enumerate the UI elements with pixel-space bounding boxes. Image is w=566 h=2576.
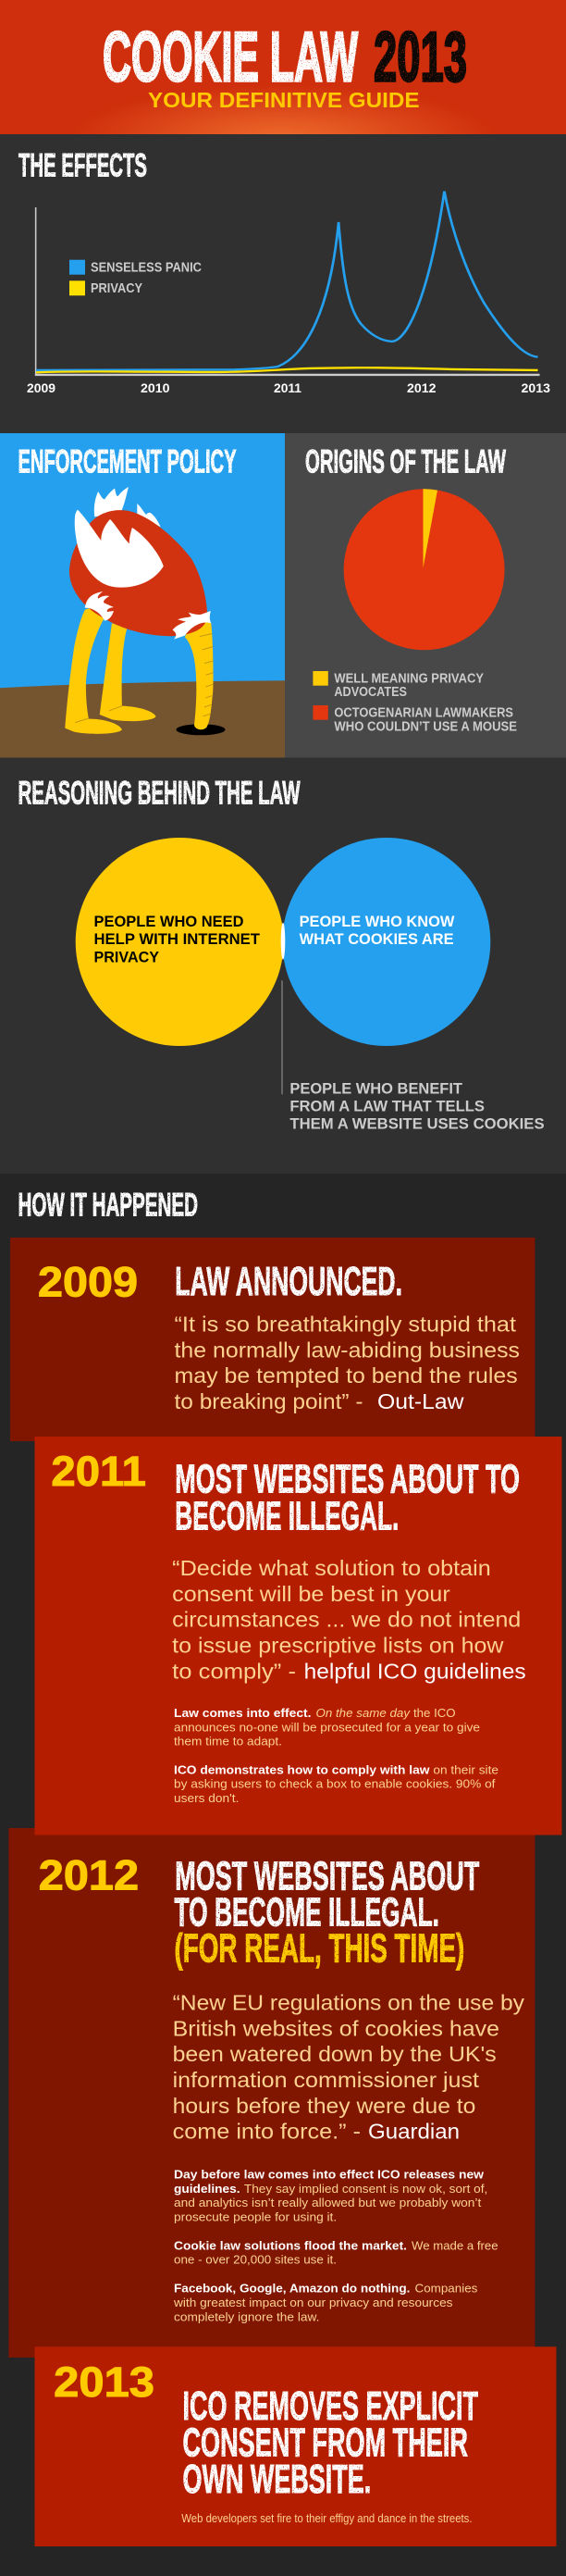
heading: reasoning: REASONING BEHIND THE LAW xyxy=(18,775,300,811)
quote: guardian: information commissioner just xyxy=(173,2068,480,2092)
body text: 2012 events: prosecute people for using it. xyxy=(174,2210,337,2223)
heading: how it happened: HOW IT HAPPENED xyxy=(18,1187,198,1223)
chart legend xyxy=(69,260,202,296)
quote: ico guidelines: helpful ICO guidelines xyxy=(304,1659,526,1683)
body text: 2012 events: Facebook, Google, Amazon do nothing. xyxy=(174,2283,410,2296)
quote: out-law: to breaking point” - xyxy=(174,1389,363,1413)
pie chart xyxy=(344,489,505,650)
body text: 2011 events: Law comes into effect. xyxy=(174,1707,311,1720)
quote: guardian: been watered down by the UK's xyxy=(173,2042,497,2066)
body text: 2012 events: with greatest impact on our privacy and resources xyxy=(173,2296,453,2309)
pie legend xyxy=(313,671,517,734)
subtitle: YOUR DEFINITIVE GUIDE xyxy=(148,88,420,112)
header banner xyxy=(0,0,566,134)
year 2009: 2009 xyxy=(38,1258,138,1305)
body text: 2012 events xyxy=(173,2169,498,2323)
panel: 2012 xyxy=(8,1828,535,2358)
callout: people who benefit: THEM A WEBSITE USES COOKIES xyxy=(289,1115,545,1133)
icon: ostrich with head in the ground xyxy=(65,487,226,735)
body text: 2011 events: announces no-one will be prosecuted for a year to give xyxy=(174,1722,480,1735)
pie legend: WHO COULDN’T USE A MOUSE xyxy=(334,719,517,734)
heading: most websites about to become illegal xyxy=(175,1457,520,1539)
quote: ico guidelines xyxy=(172,1556,526,1683)
quote: out-law: may be tempted to bend the rules xyxy=(174,1363,518,1388)
quote: guardian xyxy=(173,1990,525,2144)
venn diagram: PEOPLE WHO NEED xyxy=(94,913,244,930)
quote: ico guidelines: circumstances ... we do not intend xyxy=(172,1608,521,1632)
panel: 2013 xyxy=(35,2346,557,2546)
quote: ico guidelines: to issue prescriptive lists on how xyxy=(172,1634,504,1658)
body text: 2011 events: on their site xyxy=(433,1764,498,1777)
title: 2013 xyxy=(374,18,467,96)
body text: 2012 events: and analytics isn’t really allowed but we probably won’t xyxy=(174,2196,482,2209)
body text: 2011 events: the ICO xyxy=(413,1707,456,1720)
venn diagram: PEOPLE WHO KNOW xyxy=(300,913,455,930)
line chart: 2010 xyxy=(141,380,170,395)
body text: 2011 events xyxy=(174,1707,498,1805)
quote: ico guidelines: consent will be best in your xyxy=(172,1582,450,1606)
body text: 2012 events: Cookie law solutions flood the market. xyxy=(174,2239,407,2252)
callout: people who benefit: FROM A LAW THAT TELLS xyxy=(289,1098,485,1115)
venn diagram xyxy=(76,838,490,1046)
heading: ico removes explicit consent: OWN WEBSITE. xyxy=(183,2458,371,2502)
year 2012: 2012 xyxy=(39,1851,139,1898)
quote: guardian: “New EU regulations on the use by xyxy=(173,1990,525,2014)
panel: enforcement policy xyxy=(0,433,285,757)
ground xyxy=(0,680,285,757)
chart legend: PRIVACY xyxy=(91,281,142,296)
line chart: 2013 xyxy=(522,380,550,395)
body text: 2011 events: users don't. xyxy=(174,1792,239,1805)
panel: reasoning behind the law xyxy=(0,757,566,1174)
quote: guardian: come into force.” - xyxy=(173,2120,361,2144)
closing line: Web developers set fire to their effigy and dance in the streets. xyxy=(181,2512,473,2525)
body text: 2012 events: They say implied consent is now ok, sort of, xyxy=(244,2183,487,2196)
title: COOKIE LAW xyxy=(103,18,358,96)
body text: 2012 events: Companies xyxy=(414,2283,477,2296)
quote: ico guidelines: “Decide what solution to obtain xyxy=(172,1556,491,1580)
heading: most websites for real xyxy=(174,1854,480,1972)
quote: out-law: Out-Law xyxy=(377,1389,464,1413)
body text: 2012 events: Day before law comes into effect ICO releases new xyxy=(174,2169,484,2182)
venn diagram: PRIVACY xyxy=(94,948,160,965)
year 2011: 2011 xyxy=(51,1448,146,1495)
line chart xyxy=(27,192,550,395)
body text: 2011 events: them time to adapt. xyxy=(174,1736,282,1748)
body text: 2011 events: ICO demonstrates how to comply with law xyxy=(174,1764,430,1777)
quote: guardian: hours before they were due to xyxy=(173,2094,475,2118)
body text: 2012 events: guidelines. xyxy=(174,2183,240,2196)
quote: out-law: “It is so breathtakingly stupid that xyxy=(174,1312,517,1336)
body text: 2012 events: completely ignore the law. xyxy=(174,2310,319,2323)
body text: 2012 events: We made a free xyxy=(412,2239,498,2252)
quote: out-law: the normally law-abiding business xyxy=(174,1338,520,1363)
body text: 2012 events: one - over 20,000 sites use it. xyxy=(174,2254,337,2267)
heading: ico removes explicit consent xyxy=(183,2384,478,2502)
venn diagram: WHAT COOKIES ARE xyxy=(300,930,454,948)
line chart: 2012 xyxy=(407,380,437,395)
callout: people who benefit: PEOPLE WHO BENEFIT xyxy=(289,1080,463,1098)
heading: law announced: LAW ANNOUNCED. xyxy=(175,1260,402,1304)
line chart: 2011 xyxy=(274,380,301,395)
heading: the effects: THE EFFECTS xyxy=(18,148,147,184)
pie legend: ADVOCATES xyxy=(334,685,407,700)
line chart: 2009 xyxy=(27,380,55,395)
panel: 2011 xyxy=(35,1437,562,1835)
chart legend: SENSELESS PANIC xyxy=(91,260,202,275)
panel: the effects xyxy=(0,134,566,433)
callout: people who benefit xyxy=(282,980,545,1133)
pie legend: OCTOGENARIAN LAWMAKERS xyxy=(334,705,513,720)
body text: 2011 events: by asking users to check a box to enable cookies. 90% of xyxy=(174,1778,496,1791)
panel: 2009 xyxy=(10,1238,535,1441)
quote: ico guidelines: to comply” - xyxy=(172,1659,296,1683)
body text: 2011 events: On the same day xyxy=(316,1707,411,1720)
year 2013: 2013 xyxy=(54,2358,154,2406)
quote: guardian: Guardian xyxy=(368,2120,460,2144)
quote: out-law xyxy=(174,1312,520,1413)
heading: enforcement policy: ENFORCEMENT POLICY xyxy=(18,444,237,480)
quote: guardian: British websites of cookies have xyxy=(173,2016,499,2040)
venn diagram: HELP WITH INTERNET xyxy=(94,930,261,948)
pie legend: WELL MEANING PRIVACY xyxy=(334,671,484,686)
panel: origins of the law xyxy=(285,433,566,757)
heading: most websites about to become illegal: BECOME ILLEGAL. xyxy=(175,1495,399,1539)
